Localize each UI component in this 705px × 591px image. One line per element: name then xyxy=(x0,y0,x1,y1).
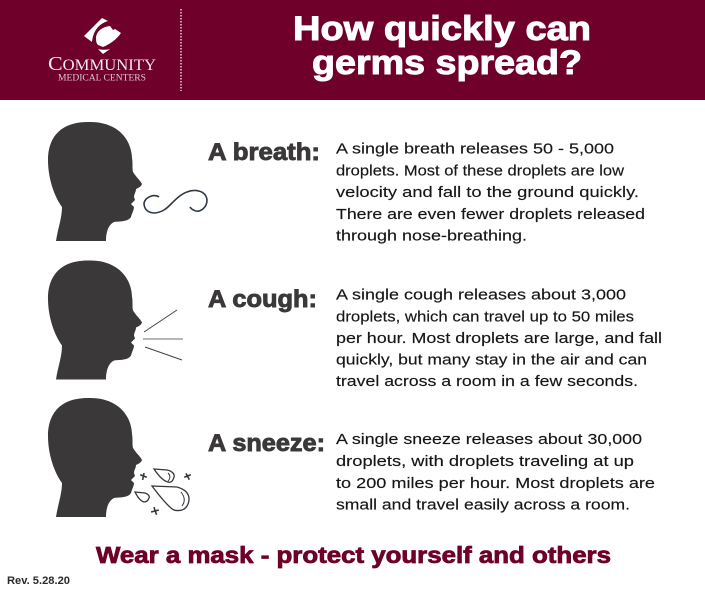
panel: sneeze xyxy=(48,398,655,517)
call to action: Wear a mask - protect yourself and others xyxy=(96,542,611,568)
text: sneeze description: to 200 miles per hour. Most droplets are xyxy=(336,475,655,492)
title: germs spread? xyxy=(312,44,582,82)
label: a sneeze: A sneeze: xyxy=(208,430,325,457)
revision note: Rev. 5.28.20 xyxy=(7,575,70,587)
text: breath description: There are even fewer droplets released xyxy=(336,206,645,223)
label: a breath: A breath: xyxy=(208,139,320,166)
title: How quickly can xyxy=(293,10,591,48)
text: cough description: per hour. Most droplets are large, and fall xyxy=(336,330,662,347)
logo subline: MEDICAL CENTERS xyxy=(58,72,146,82)
text: sneeze description xyxy=(336,431,655,514)
text: sneeze description: droplets, with droplets traveling at up xyxy=(336,453,634,470)
icon: droplets and specks xyxy=(135,469,192,516)
logo: Community Medical Centers xyxy=(48,18,156,82)
icon: head coughing xyxy=(48,260,142,380)
text: cough description: quickly, but many stay in the air and can xyxy=(336,352,647,368)
text: cough description xyxy=(336,286,662,390)
text: cough description: A single cough releases about 3,000 xyxy=(336,286,626,304)
text: breath description: through nose-breathing. xyxy=(336,228,527,244)
text: breath description xyxy=(336,140,645,244)
icon: cough lines xyxy=(143,310,183,360)
text: cough description: droplets, which can travel up to 50 miles xyxy=(336,308,634,326)
text: breath description: velocity and fall to the ground quickly. xyxy=(336,184,639,201)
panel: cough xyxy=(48,260,662,390)
logo mark xyxy=(84,18,121,54)
icon: head breathing xyxy=(48,122,142,241)
title xyxy=(293,10,591,82)
dotted divider xyxy=(180,9,182,91)
text: breath description: A single breath releases 50 - 5,000 xyxy=(336,140,614,158)
text: cough description: travel across a room in a few seconds. xyxy=(336,373,638,390)
text: sneeze description: small and travel easily across a room. xyxy=(336,496,630,514)
icon: breath swirl xyxy=(144,191,207,213)
panel: breath xyxy=(48,122,645,244)
text: breath description: droplets. Most of these droplets are low xyxy=(336,162,624,180)
logo wordmark: COMMUNITY xyxy=(48,53,156,75)
label: a cough: A cough: xyxy=(208,286,317,313)
icon: head sneezing xyxy=(48,398,142,517)
text: sneeze description: A single sneeze releases about 30,000 xyxy=(336,431,642,448)
header band xyxy=(0,0,705,100)
